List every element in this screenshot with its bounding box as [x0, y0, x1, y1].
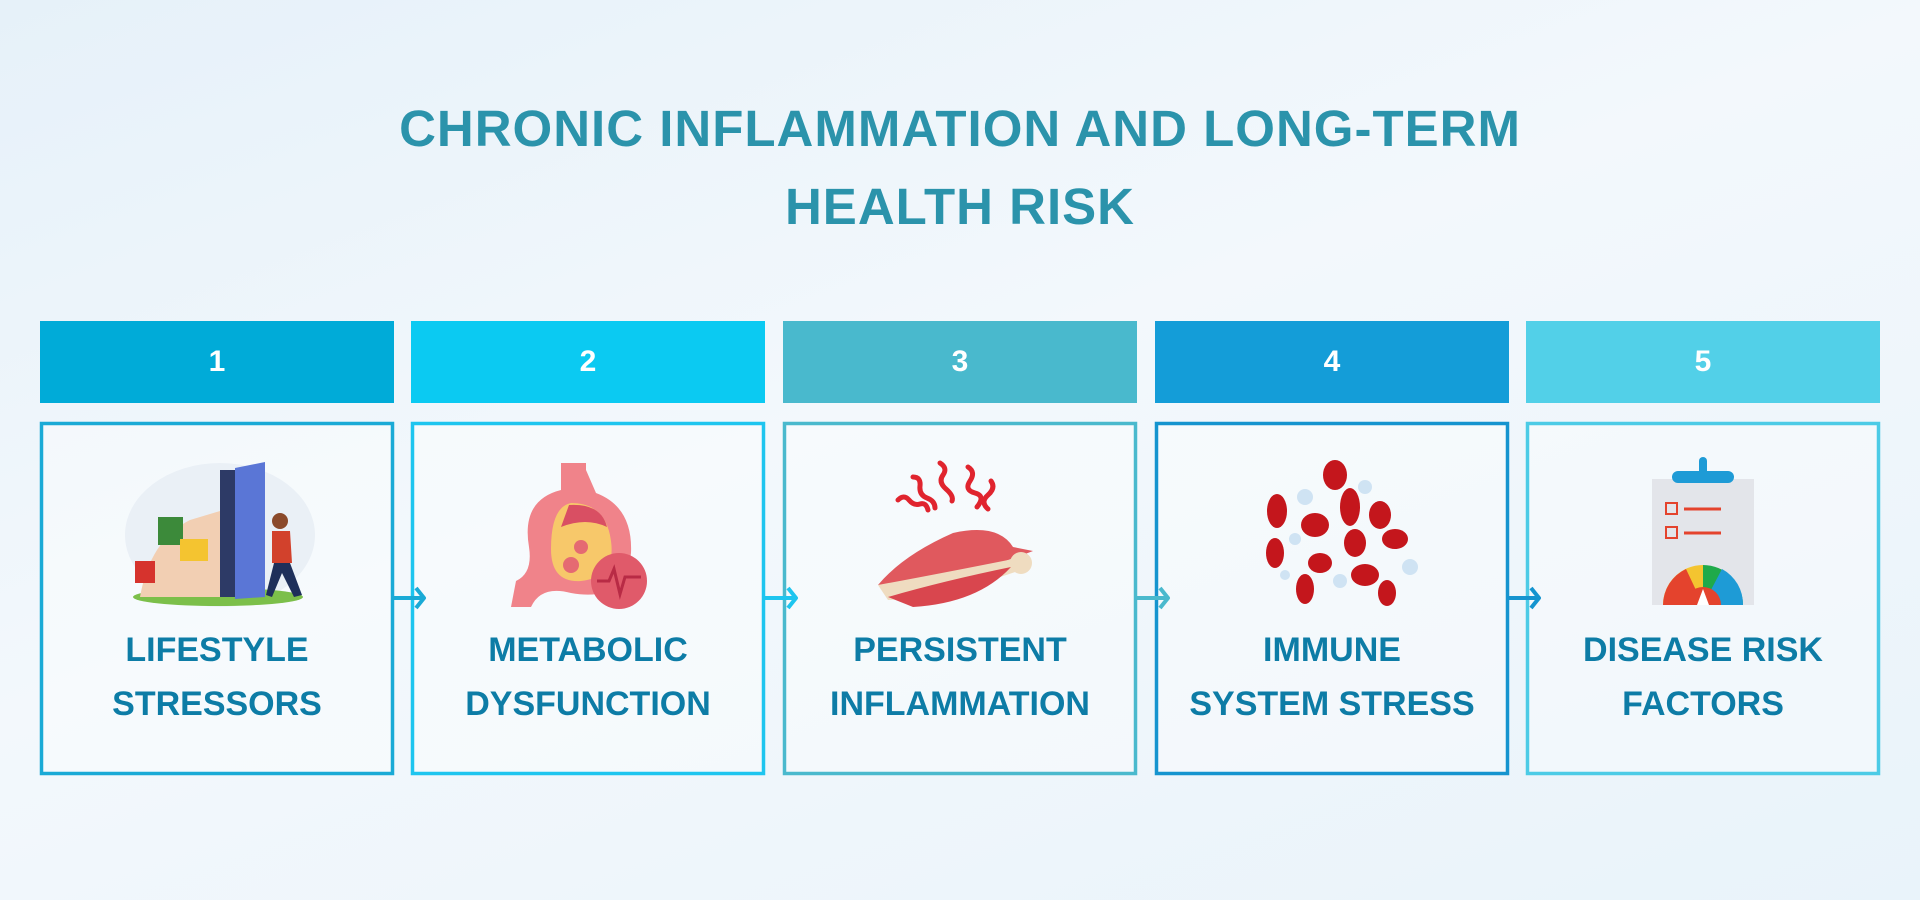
icon: stomach — [511, 463, 647, 609]
label 1: LIFESTYLE — [125, 631, 309, 669]
title: CHRONIC INFLAMMATION AND LONG-TERM — [399, 100, 1521, 157]
title — [399, 100, 1521, 235]
label 3: INFLAMMATION — [830, 685, 1090, 723]
header 3: 3 — [952, 345, 968, 378]
label 4: IMMUNE — [1263, 631, 1401, 669]
header 3 — [783, 321, 1137, 403]
label 4 — [1189, 631, 1475, 723]
icon: inflamed muscle — [878, 460, 1033, 607]
label 3 — [830, 631, 1090, 723]
header 1 — [40, 321, 394, 403]
header 1: 1 — [209, 345, 225, 378]
icon: person pushing door — [125, 462, 315, 607]
header 2 — [411, 321, 765, 403]
label 5 — [1583, 631, 1823, 723]
header 5: 5 — [1695, 345, 1711, 378]
label 2: METABOLIC — [488, 631, 688, 669]
header 5 — [1526, 321, 1880, 403]
label 5: DISEASE RISK — [1583, 631, 1823, 669]
label 2 — [465, 631, 711, 723]
header 4: 4 — [1324, 345, 1340, 378]
header 4 — [1155, 321, 1509, 403]
label 1 — [112, 631, 322, 723]
label 5: FACTORS — [1622, 685, 1784, 723]
label 4: SYSTEM STRESS — [1189, 685, 1475, 723]
label 2: DYSFUNCTION — [465, 685, 711, 723]
icon: blood cells — [1266, 460, 1418, 606]
label 3: PERSISTENT — [853, 631, 1067, 669]
header 2: 2 — [580, 345, 596, 378]
label 1: STRESSORS — [112, 685, 322, 723]
title: HEALTH RISK — [785, 178, 1135, 235]
icon: clipboard risk meter — [1652, 457, 1754, 605]
